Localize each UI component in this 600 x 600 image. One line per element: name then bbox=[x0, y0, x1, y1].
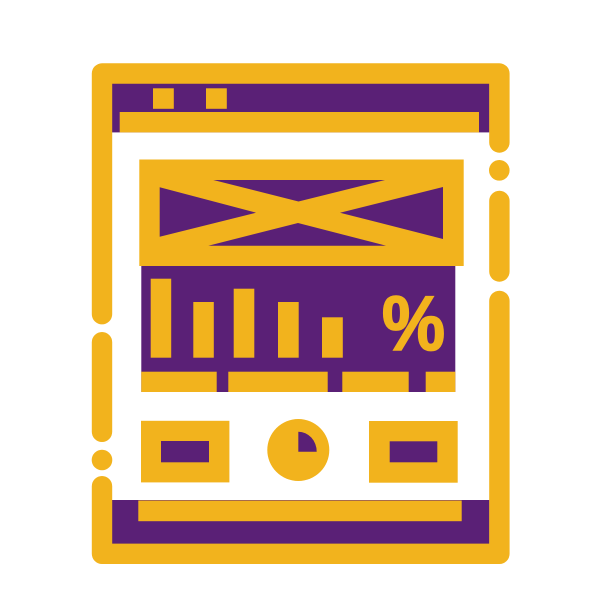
pie chart bbox=[267, 419, 329, 481]
percent sign: % bbox=[382, 281, 445, 367]
bar chart bbox=[151, 279, 343, 358]
header address bar bbox=[120, 112, 479, 132]
chart panel bbox=[141, 262, 455, 392]
window frame outline bbox=[92, 74, 510, 554]
window button left bbox=[153, 88, 174, 109]
left widget bbox=[141, 421, 229, 482]
header band bbox=[112, 83, 489, 132]
footer band bbox=[112, 500, 489, 544]
right widget bbox=[369, 421, 458, 483]
legend bars bbox=[141, 372, 455, 392]
image placeholder panel bbox=[139, 160, 464, 266]
window button right bbox=[206, 88, 227, 109]
placeholder triangles bbox=[160, 180, 443, 246]
footer bar bbox=[138, 500, 462, 521]
